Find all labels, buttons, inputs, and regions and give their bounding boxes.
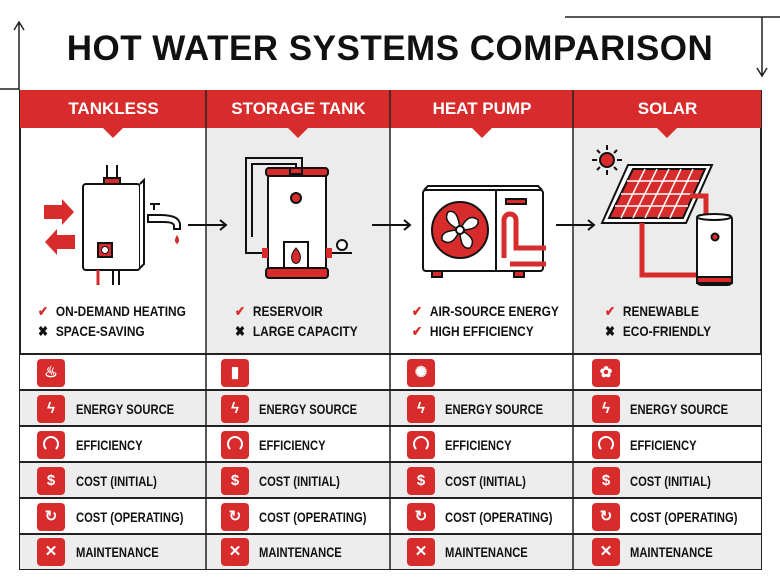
- headers: [20, 90, 207, 128]
- row icons and labels: EFFICIENCY: [630, 437, 697, 453]
- text: ✔: [412, 323, 422, 339]
- row icons and labels: MAINTENANCE: [630, 544, 713, 560]
- row icons and labels: $: [417, 472, 425, 489]
- feature lists: ON-DEMAND HEATING: [56, 303, 186, 319]
- row icons and labels: ✕: [600, 543, 612, 560]
- feature lists: [38, 303, 186, 339]
- text: ✔: [412, 303, 422, 319]
- text: ECO-FRIENDLY: [623, 323, 711, 339]
- row icons and labels: ♨: [44, 364, 58, 381]
- comparison table: [19, 90, 762, 570]
- row icons and labels: ↻: [415, 508, 427, 525]
- row icons and labels: EFFICIENCY: [259, 437, 326, 453]
- row icons and labels: $: [602, 472, 610, 489]
- text: RENEWABLE: [623, 303, 699, 319]
- attribute rows: [20, 353, 761, 569]
- headers: TANKLESS: [68, 99, 159, 118]
- row icons and labels: EFFICIENCY: [76, 437, 143, 453]
- row icons and labels: ϟ: [47, 400, 55, 417]
- row icons and labels: ϟ: [231, 400, 239, 417]
- feature lists: ✖: [38, 323, 48, 339]
- row icons and labels: ENERGY SOURCE: [630, 401, 728, 417]
- text: ✖: [235, 323, 245, 339]
- row icons and labels: ✕: [415, 543, 427, 560]
- row icons and labels: COST (OPERATING): [76, 509, 183, 525]
- row icons and labels: COST (INITIAL): [445, 473, 526, 489]
- row icons and labels: ϟ: [417, 400, 425, 417]
- row icons and labels: ↻: [45, 508, 57, 525]
- row icons and labels: ↻: [229, 508, 241, 525]
- feature lists: ✔: [38, 303, 48, 319]
- row icons and labels: MAINTENANCE: [445, 544, 528, 560]
- row icons and labels: ✺: [415, 364, 427, 381]
- row icons and labels: ↻: [600, 508, 612, 525]
- row icons and labels: ENERGY SOURCE: [76, 401, 174, 417]
- icon: heat pump: [423, 186, 594, 277]
- row icons and labels: COST (INITIAL): [76, 473, 157, 489]
- row icons and labels: MAINTENANCE: [76, 544, 159, 560]
- row icons and labels: EFFICIENCY: [445, 437, 512, 453]
- text: ✔: [235, 303, 245, 319]
- text: HEAT PUMP: [433, 99, 531, 118]
- row icons and labels: ENERGY SOURCE: [445, 401, 543, 417]
- row icons and labels: $: [231, 472, 239, 489]
- row icons and labels: ✕: [45, 543, 57, 560]
- row icons and labels: ✿: [600, 364, 612, 381]
- feature lists: SPACE-SAVING: [56, 323, 145, 339]
- row icons and labels: COST (INITIAL): [259, 473, 340, 489]
- text: RESERVOIR: [253, 303, 323, 319]
- row icons and labels: COST (OPERATING): [445, 509, 552, 525]
- text: HIGH EFFICIENCY: [430, 323, 534, 339]
- icon: solar: [592, 145, 732, 285]
- text: AIR-SOURCE ENERGY: [430, 303, 559, 319]
- row icons and labels: COST (INITIAL): [630, 473, 711, 489]
- column backgrounds: [207, 128, 390, 353]
- icon: storage tank: [246, 158, 410, 278]
- row icons and labels: [37, 359, 737, 566]
- text: ✖: [605, 323, 615, 339]
- row icons and labels: COST (OPERATING): [630, 509, 737, 525]
- title: HOT WATER SYSTEMS COMPARISON: [67, 29, 713, 68]
- text: ✔: [605, 303, 615, 319]
- text: STORAGE TANK: [231, 99, 366, 118]
- row icons and labels: $: [47, 472, 55, 489]
- text: LARGE CAPACITY: [253, 323, 358, 339]
- row icons and labels: MAINTENANCE: [259, 544, 342, 560]
- row icons and labels: ENERGY SOURCE: [259, 401, 357, 417]
- row icons and labels: ϟ: [602, 400, 610, 417]
- row icons and labels: ▮: [231, 364, 239, 381]
- row icons and labels: ✕: [229, 543, 241, 560]
- text: SOLAR: [638, 99, 697, 118]
- row icons and labels: COST (OPERATING): [259, 509, 366, 525]
- icon: tankless heater: [44, 165, 226, 285]
